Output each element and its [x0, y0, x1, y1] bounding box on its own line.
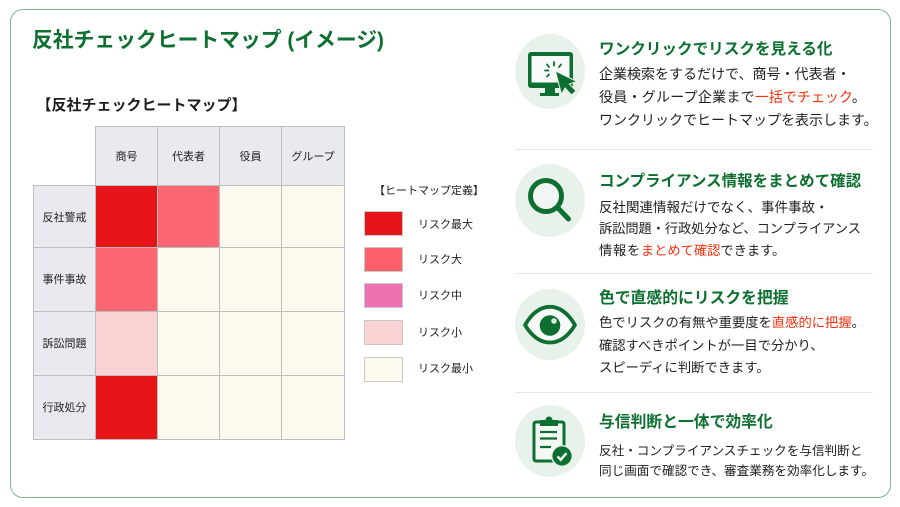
- text: one-click: [599, 41, 878, 128]
- text: one-click: 役員・グループ企業まで一括でチェック。: [599, 89, 866, 105]
- legend items: リスク小: [418, 327, 462, 339]
- text: compliance: 訴訟問題・行政処分など、コンプライアンス: [599, 221, 861, 236]
- body: 色でリスクの有無や重要度を直感的に把握。: [599, 315, 865, 330]
- column headers: [95, 126, 345, 185]
- row: 事件事故: 事件事故: [42, 274, 86, 286]
- legend title: 【ヒートマップ定義】: [374, 185, 484, 197]
- icon: monitor click: [515, 34, 585, 109]
- icon: magnifier: [515, 164, 585, 237]
- legend items: リスク大: [418, 254, 462, 266]
- text: credit: [599, 413, 874, 478]
- heading: 色で直感的にリスクを把握: [599, 290, 789, 307]
- text: credit: 同じ画面で確認でき、審査業務を効率化します。: [599, 464, 874, 478]
- body: 反社関連情報だけでなく、事件事故・: [599, 200, 828, 215]
- row: 訴訟問題: 訴訟問題: [42, 338, 86, 350]
- heading: ワンクリックでリスクを見える化: [599, 41, 832, 58]
- text: compliance: 情報をまとめて確認できます。: [599, 243, 785, 258]
- legend items: リスク最大: [418, 219, 473, 231]
- heading: heatmap: 【反社チェックヒートマップ】: [36, 97, 247, 114]
- text: color: [599, 289, 865, 375]
- row: 反社警戒: 反社警戒: [42, 212, 86, 224]
- column headers: グループ: [291, 151, 335, 163]
- column headers: 代表者: [172, 151, 205, 163]
- row: 行政処分: [33, 376, 345, 440]
- legend items: リスク最小: [418, 363, 473, 375]
- row: 事件事故: [33, 248, 345, 311]
- legend items: リスク中: [418, 290, 462, 302]
- heading: コンプライアンス情報をまとめて確認: [599, 173, 861, 190]
- text: compliance: [599, 172, 861, 258]
- chart: heatmap grid: [33, 126, 345, 440]
- heading: 与信判断と一体で効率化: [599, 414, 773, 431]
- column headers: 商号: [116, 151, 138, 163]
- text: color: スピーディに判断できます。: [599, 360, 770, 375]
- text: one-click: ワンクリックでヒートマップを表示します。: [599, 112, 878, 128]
- column headers: 役員: [240, 151, 262, 163]
- row: 反社警戒: [33, 185, 345, 247]
- legend: [364, 184, 484, 382]
- row: 行政処分: 行政処分: [42, 402, 86, 414]
- body: 反社・コンプライアンスチェックを与信判断と: [599, 444, 862, 458]
- title: 反社チェックヒートマップ (イメージ): [32, 29, 384, 52]
- row: 訴訟問題: [33, 312, 345, 375]
- icon: clipboard check: [515, 405, 585, 477]
- legend items: [364, 211, 473, 382]
- icon: eye: [515, 289, 585, 360]
- text: color: 確認すべきポイントが一目で分かり、: [599, 338, 824, 353]
- body: 企業検索をするだけで、商号・代表者・: [599, 66, 850, 82]
